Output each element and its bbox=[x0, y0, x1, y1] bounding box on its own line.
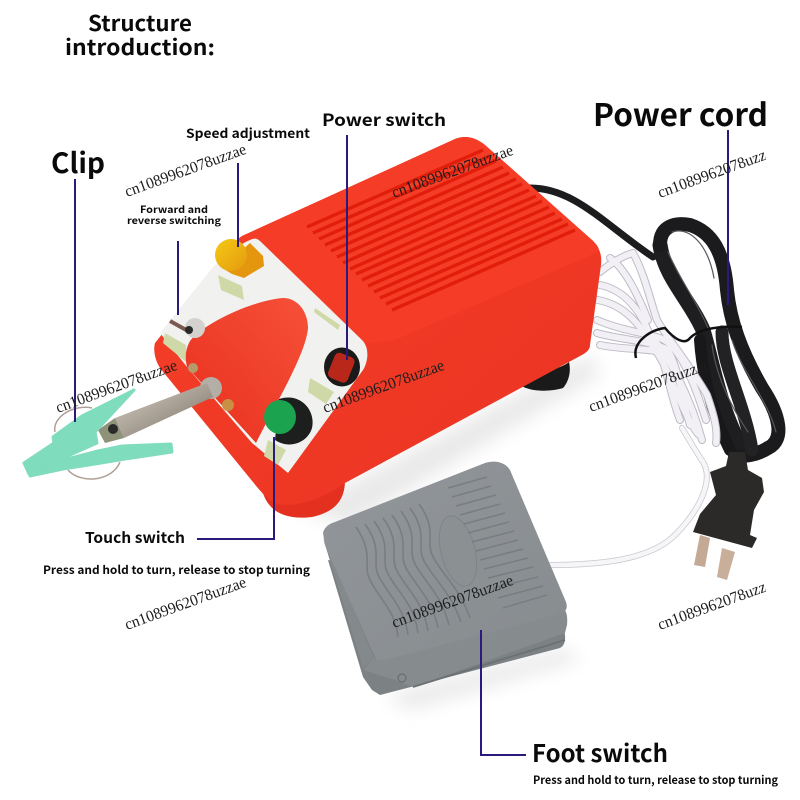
label: power switch: Power switch bbox=[322, 107, 446, 131]
white control panel bbox=[160, 239, 367, 473]
clip shaft bbox=[98, 383, 213, 443]
device body bbox=[154, 137, 601, 505]
label: foot switch: Press and hold to turn, release to stop turning bbox=[533, 772, 778, 788]
label: touch switch: Press and hold to turn, release to stop turning bbox=[43, 562, 310, 578]
label: touch switch bbox=[43, 437, 310, 578]
plug bbox=[693, 452, 764, 580]
watermarks: cn1089962078uzzae bbox=[123, 574, 249, 634]
label: foot switch bbox=[481, 630, 778, 788]
cable ties bbox=[635, 327, 742, 358]
label: power cord: Power cord bbox=[593, 90, 768, 135]
watermarks: cn1089962078uzzae bbox=[321, 357, 447, 417]
ventilation ribs bbox=[307, 150, 575, 310]
label: foot switch: Foot switch bbox=[532, 734, 668, 769]
white wire bundle bbox=[550, 253, 717, 565]
wave pattern bbox=[356, 504, 470, 637]
label: forward and reverse switching: reverse switching bbox=[127, 212, 221, 227]
panel labels bbox=[163, 275, 340, 465]
power cord: black loops bbox=[530, 188, 778, 456]
top face bbox=[242, 137, 599, 344]
title bbox=[65, 7, 215, 62]
title: Structure bbox=[88, 7, 192, 38]
green touch switch bbox=[264, 397, 313, 444]
label: forward and reverse switching: Forward and bbox=[140, 201, 208, 216]
screws and collar bbox=[188, 363, 234, 411]
pedal front skirt bbox=[363, 610, 567, 687]
power rocker switch bbox=[324, 348, 360, 386]
watermarks bbox=[54, 141, 782, 634]
white cord to foot switch bbox=[550, 428, 707, 565]
cone housing bbox=[186, 298, 308, 443]
watermarks: cn1089962078uzzae bbox=[587, 356, 713, 416]
soft shadows bbox=[300, 355, 600, 710]
watermarks: cn1089962078uzzae bbox=[390, 572, 516, 632]
key ring bbox=[55, 407, 120, 479]
label: forward and reverse switching bbox=[127, 201, 221, 315]
body silhouette bbox=[154, 137, 601, 505]
pedal gap bbox=[413, 640, 565, 687]
line pattern bbox=[448, 477, 547, 608]
label: clip: Clip bbox=[51, 142, 105, 182]
green clip bbox=[24, 390, 172, 476]
pedal side bbox=[323, 538, 374, 668]
label: speed adjustment: Speed adjustment bbox=[186, 123, 311, 142]
foot switch bbox=[323, 462, 567, 695]
speed knob bbox=[215, 239, 264, 278]
watermarks: cn1089962078uzzae bbox=[390, 142, 516, 202]
rear foot bbox=[520, 362, 570, 391]
pedal base bbox=[328, 560, 565, 695]
front feet bbox=[262, 480, 345, 518]
watermarks: cn1089962078uzzae bbox=[656, 574, 782, 634]
pedal top bbox=[323, 462, 567, 660]
title: introduction: bbox=[65, 31, 215, 62]
watermarks: cn1089962078uzzae bbox=[656, 142, 782, 202]
toggle switch bbox=[170, 318, 205, 338]
label: touch switch: Touch switch bbox=[85, 527, 185, 548]
watermarks: cn1089962078uzzae bbox=[54, 357, 180, 417]
label: speed adjustment bbox=[186, 123, 311, 247]
watermarks: cn1089962078uzzae bbox=[123, 141, 249, 201]
oval emboss bbox=[433, 512, 483, 590]
